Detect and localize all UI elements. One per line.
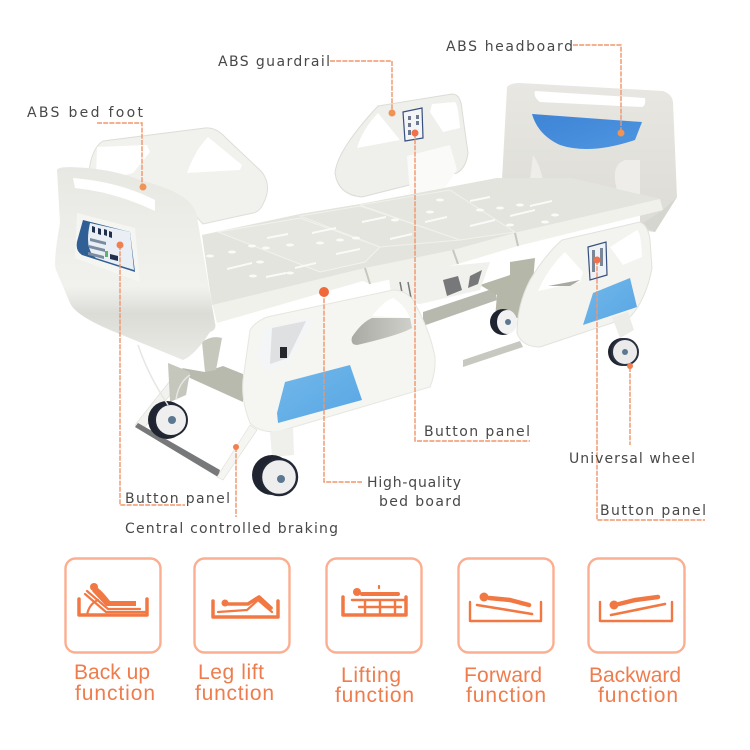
- callout: high-quality bed board: [319, 287, 461, 510]
- callout: ABS bed foot: ABS bed foot: [27, 105, 144, 121]
- back wheel: [490, 309, 517, 335]
- label: back up function: Back up: [74, 661, 150, 684]
- label: backward function: Backward: [589, 664, 681, 687]
- callout: central controlled braking: [125, 444, 338, 537]
- label: back up function: [74, 661, 155, 705]
- label: backward function: [589, 664, 681, 707]
- callout: universal wheel: Universal wheel: [569, 451, 695, 467]
- callout: ABS guardrail: [218, 54, 396, 116]
- callout: high-quality bed board: High-quality: [367, 475, 461, 491]
- icon: forward tilt: [458, 558, 554, 652]
- back guardrail: [335, 94, 468, 197]
- function: backward: [588, 558, 684, 707]
- label: backward function: function: [598, 684, 678, 707]
- callout: high-quality bed board: bed board: [379, 494, 461, 510]
- icon: lifting: [326, 558, 422, 652]
- callout: ABS guardrail: ABS guardrail: [218, 54, 330, 70]
- label: lifting function: function: [335, 684, 414, 707]
- function: leg lift: [194, 558, 290, 705]
- brake pedal: [135, 377, 257, 480]
- callout: guardrail button panel: Button panel: [424, 424, 530, 440]
- foot board: [55, 167, 215, 360]
- label: forward function: function: [466, 684, 546, 707]
- under-frame: [182, 258, 535, 402]
- deck perforations: [206, 196, 559, 278]
- callout: guardrail button panel: [412, 130, 530, 441]
- icon: back up: [66, 558, 160, 652]
- label: leg lift function: [195, 661, 274, 705]
- callout: ABS headboard: ABS headboard: [446, 39, 573, 55]
- right front guardrail: [517, 222, 652, 347]
- icon: leg lift: [194, 558, 290, 652]
- callout: ABS headboard: [446, 39, 624, 136]
- label: lifting function: Lifting: [341, 664, 401, 687]
- callout: foot button panel: Button panel: [125, 491, 230, 507]
- icon: backward tilt: [588, 558, 684, 652]
- front castor: [252, 428, 297, 495]
- callout: right button panel: Button panel: [600, 503, 706, 519]
- callout: ABS bed foot: [27, 105, 146, 190]
- callout: foot button panel: [116, 242, 230, 507]
- callout: central controlled braking: Central controlled braking: [125, 521, 338, 537]
- front guardrail: [243, 290, 435, 432]
- callout: universal wheel: [569, 363, 695, 467]
- foot guardrail: [88, 128, 268, 224]
- label: forward function: [464, 664, 546, 707]
- label: leg lift function: Leg lift: [198, 661, 264, 684]
- function: back up: [66, 558, 160, 705]
- bed illustration: [55, 83, 677, 495]
- headboard: [502, 83, 677, 232]
- callout: right button panel: [594, 256, 706, 520]
- label: back up function: function: [75, 682, 155, 705]
- left castor: [138, 345, 190, 439]
- label: forward function: Forward: [464, 664, 542, 687]
- function: lifting: [326, 558, 422, 707]
- function: forward: [458, 558, 554, 707]
- right front wheel: [608, 312, 638, 366]
- callouts: [27, 39, 706, 537]
- label: lifting function: [335, 664, 414, 707]
- label: leg lift function: function: [195, 682, 274, 705]
- bed deck: [202, 178, 677, 323]
